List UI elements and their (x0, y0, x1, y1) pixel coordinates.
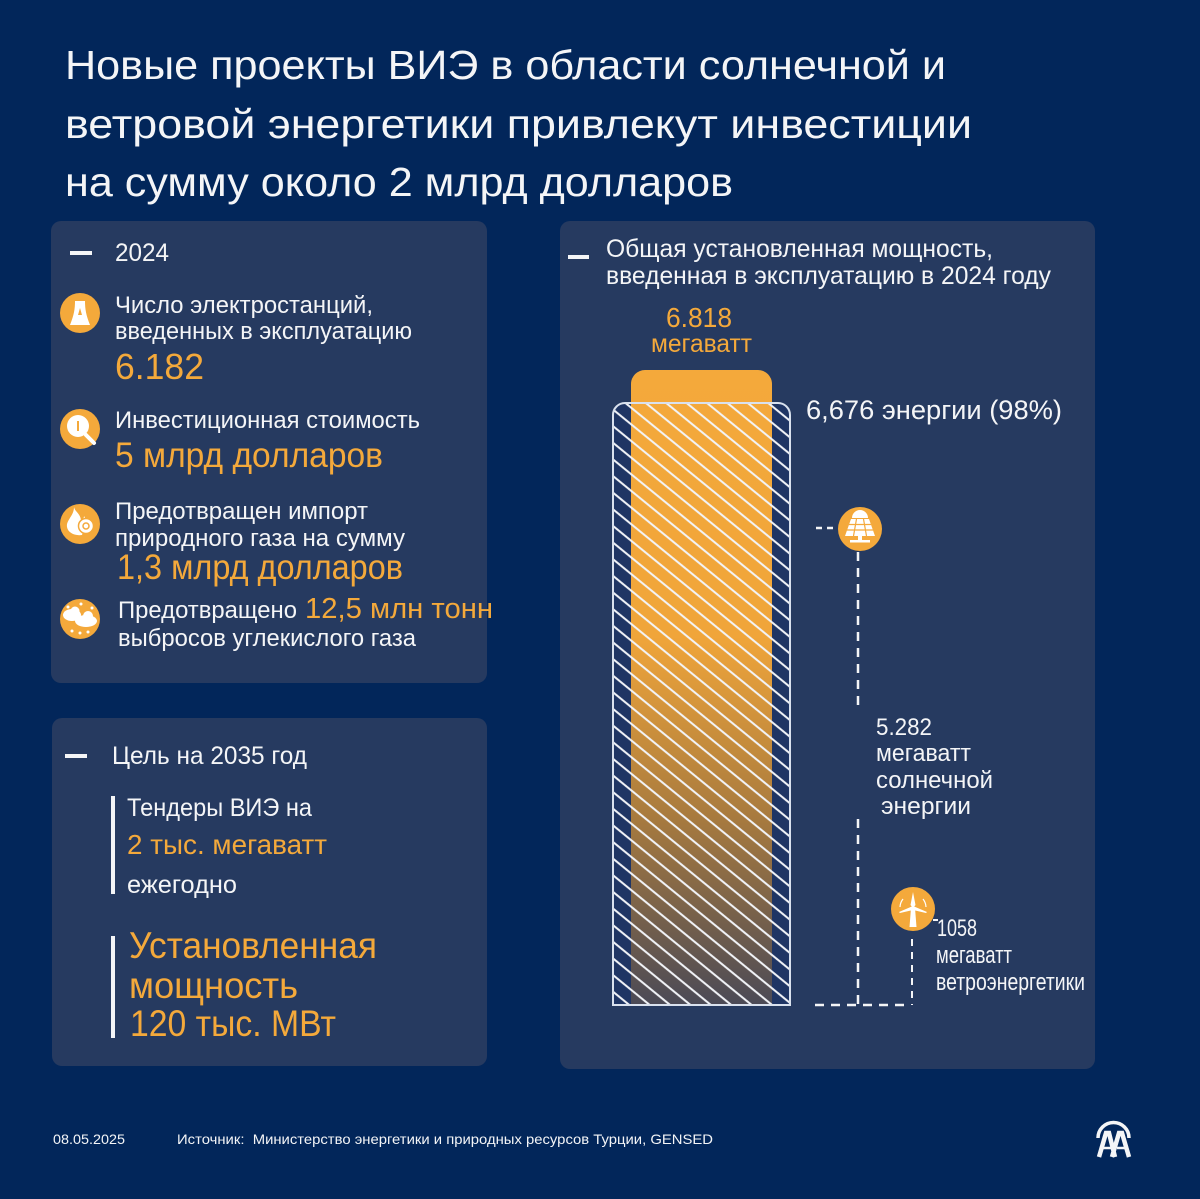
label: solar capacity: мегаватт (876, 740, 971, 767)
logo: AA (1098, 1122, 1129, 1157)
icon: wind turbine (891, 887, 935, 931)
footer: date: 08.05.2025 (53, 1131, 125, 1147)
total label (651, 302, 753, 358)
text: gas import: Предотвращен импорт (115, 498, 368, 525)
connector: solar (815, 528, 910, 1005)
title: на сумму около 2 млрд долларов (65, 159, 733, 205)
label: solar capacity: энергии (881, 793, 971, 820)
total label: мегаватт (651, 330, 753, 358)
label: renewable share: 6,676 энергии (98%) (806, 395, 1062, 425)
label: wind capacity: мегаватт (936, 942, 1012, 969)
icon: power plant (60, 293, 100, 333)
panel: goal 2035 (52, 718, 487, 1066)
panel heading: total installed capacity: введенная в эксплуатацию в 2024 году (606, 262, 1051, 290)
text: investment cost: 5 млрд долларов (115, 436, 383, 475)
icon: investment magnifier (60, 409, 100, 449)
connector: wind (912, 920, 938, 1005)
panel heading: 2024: 2024 (115, 239, 169, 267)
block: installed capacity: Установленная (129, 925, 377, 966)
panel: 2024 (51, 221, 493, 683)
text: CO2 emissions: Предотвращено (118, 597, 297, 624)
label: solar capacity (876, 714, 993, 820)
block: installed capacity (111, 925, 377, 1044)
label: wind capacity (936, 915, 1085, 996)
label: solar capacity: солнечной (876, 767, 993, 794)
text: power plants (115, 292, 412, 387)
bar chart: capacity (613, 370, 790, 1005)
text: power plants: Число электростанций, (115, 292, 373, 319)
block: RES tenders: ежегодно (127, 871, 237, 899)
panel heading: 2024 (70, 239, 169, 267)
label: wind capacity: 1058 (937, 915, 977, 942)
icon: CO2 cloud (60, 599, 100, 639)
icon: solar panel (838, 507, 882, 551)
panel: installed capacity chart (560, 221, 1095, 1069)
block: installed capacity: 120 тыс. МВт (130, 1003, 336, 1044)
text: investment cost: Инвестиционная стоимость (115, 407, 420, 434)
text: power plants: 6.182 (115, 346, 204, 387)
total label: 6.818 (666, 302, 732, 333)
label: solar capacity: 5.282 (876, 714, 932, 741)
block: RES tenders: 2 тыс. мегаватт (127, 829, 327, 860)
text: CO2 emissions (118, 593, 493, 652)
icon: gas flame and coin (60, 504, 100, 544)
text: gas import (115, 498, 405, 587)
panel heading: total installed capacity (568, 235, 1051, 290)
title: Новые проекты ВИЭ в области солнечной и (65, 42, 946, 88)
text: gas import: природного газа на сумму (115, 525, 405, 552)
label: wind capacity: ветроэнергетики (936, 969, 1085, 996)
block: RES tenders: Тендеры ВИЭ на (127, 794, 312, 822)
text: gas import: 1,3 млрд долларов (117, 548, 403, 587)
text: power plants: введенных в эксплуатацию (115, 318, 412, 345)
block: installed capacity: мощность (129, 965, 298, 1006)
title: ветровой энергетики привлекут инвестиции (65, 101, 972, 147)
panel heading: goal 2035: Цель на 2035 год (112, 742, 307, 770)
title (65, 42, 972, 205)
footer: source: Источник: Министерство энергетики и природных ресурсов Турции, GENSED (177, 1131, 713, 1147)
text: investment cost (115, 407, 420, 475)
block: RES tenders (111, 794, 327, 899)
panel heading: total installed capacity: Общая установленная мощность, (606, 235, 993, 263)
text: CO2 emissions: выбросов углекислого газа (118, 625, 417, 652)
text: CO2 emissions: 12,5 млн тонн (305, 593, 493, 625)
